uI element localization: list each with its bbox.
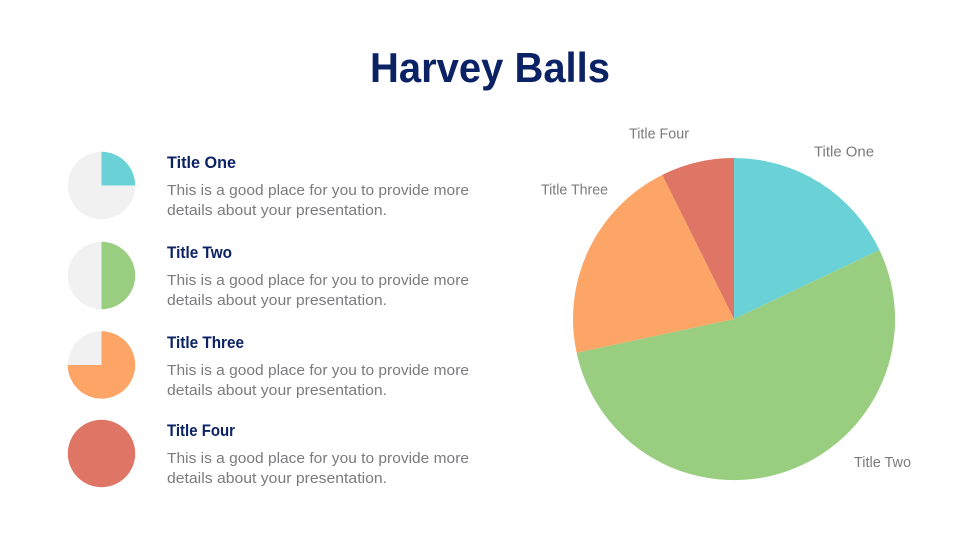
text block: Title Three description	[167, 362, 469, 399]
text block: Title Two description: This is a good place for you to provide more	[167, 272, 469, 289]
text block: Title Four description: details about your presentation.	[167, 470, 387, 487]
label: Title Four: Title Four	[629, 126, 689, 142]
heading: Title Four: Title Four	[167, 422, 236, 440]
text block: Title One description	[167, 182, 469, 219]
icon: three-quarter harvey ball	[68, 331, 135, 399]
slice: Title One	[734, 158, 879, 319]
text block: Title Three description: details about your presentation.	[167, 382, 387, 399]
pie chart	[541, 126, 911, 480]
slice: Title Two	[577, 250, 895, 480]
item: Title One	[68, 152, 469, 219]
label: Title Two: Title Two	[854, 455, 911, 471]
icon: half harvey ball	[68, 242, 135, 309]
heading: Title One: Title One	[167, 154, 236, 172]
item: Title Four	[68, 420, 469, 487]
label: Title One: Title One	[814, 144, 874, 160]
icon: full harvey ball	[68, 420, 135, 487]
text block: Title Two description	[167, 272, 469, 309]
icon: quarter harvey ball	[68, 152, 135, 219]
heading: Title Three: Title Three	[167, 334, 244, 352]
text block: Title One description: details about your presentation.	[167, 202, 387, 219]
title: Harvey Balls	[370, 44, 610, 91]
text block: Title Four description	[167, 450, 469, 487]
text block: Title Three description: This is a good place for you to provide more	[167, 362, 469, 379]
text block: Title One description: This is a good place for you to provide more	[167, 182, 469, 199]
slice: Title Three	[573, 175, 734, 353]
text block: Title Four description: This is a good place for you to provide more	[167, 450, 469, 467]
heading: Title Two: Title Two	[167, 244, 232, 262]
slice: Title Four	[662, 158, 734, 319]
label: Title Three: Title Three	[541, 182, 608, 198]
item: Title Three	[68, 331, 469, 399]
item: Title Two	[68, 242, 469, 309]
text block: Title Two description: details about your presentation.	[167, 292, 387, 309]
